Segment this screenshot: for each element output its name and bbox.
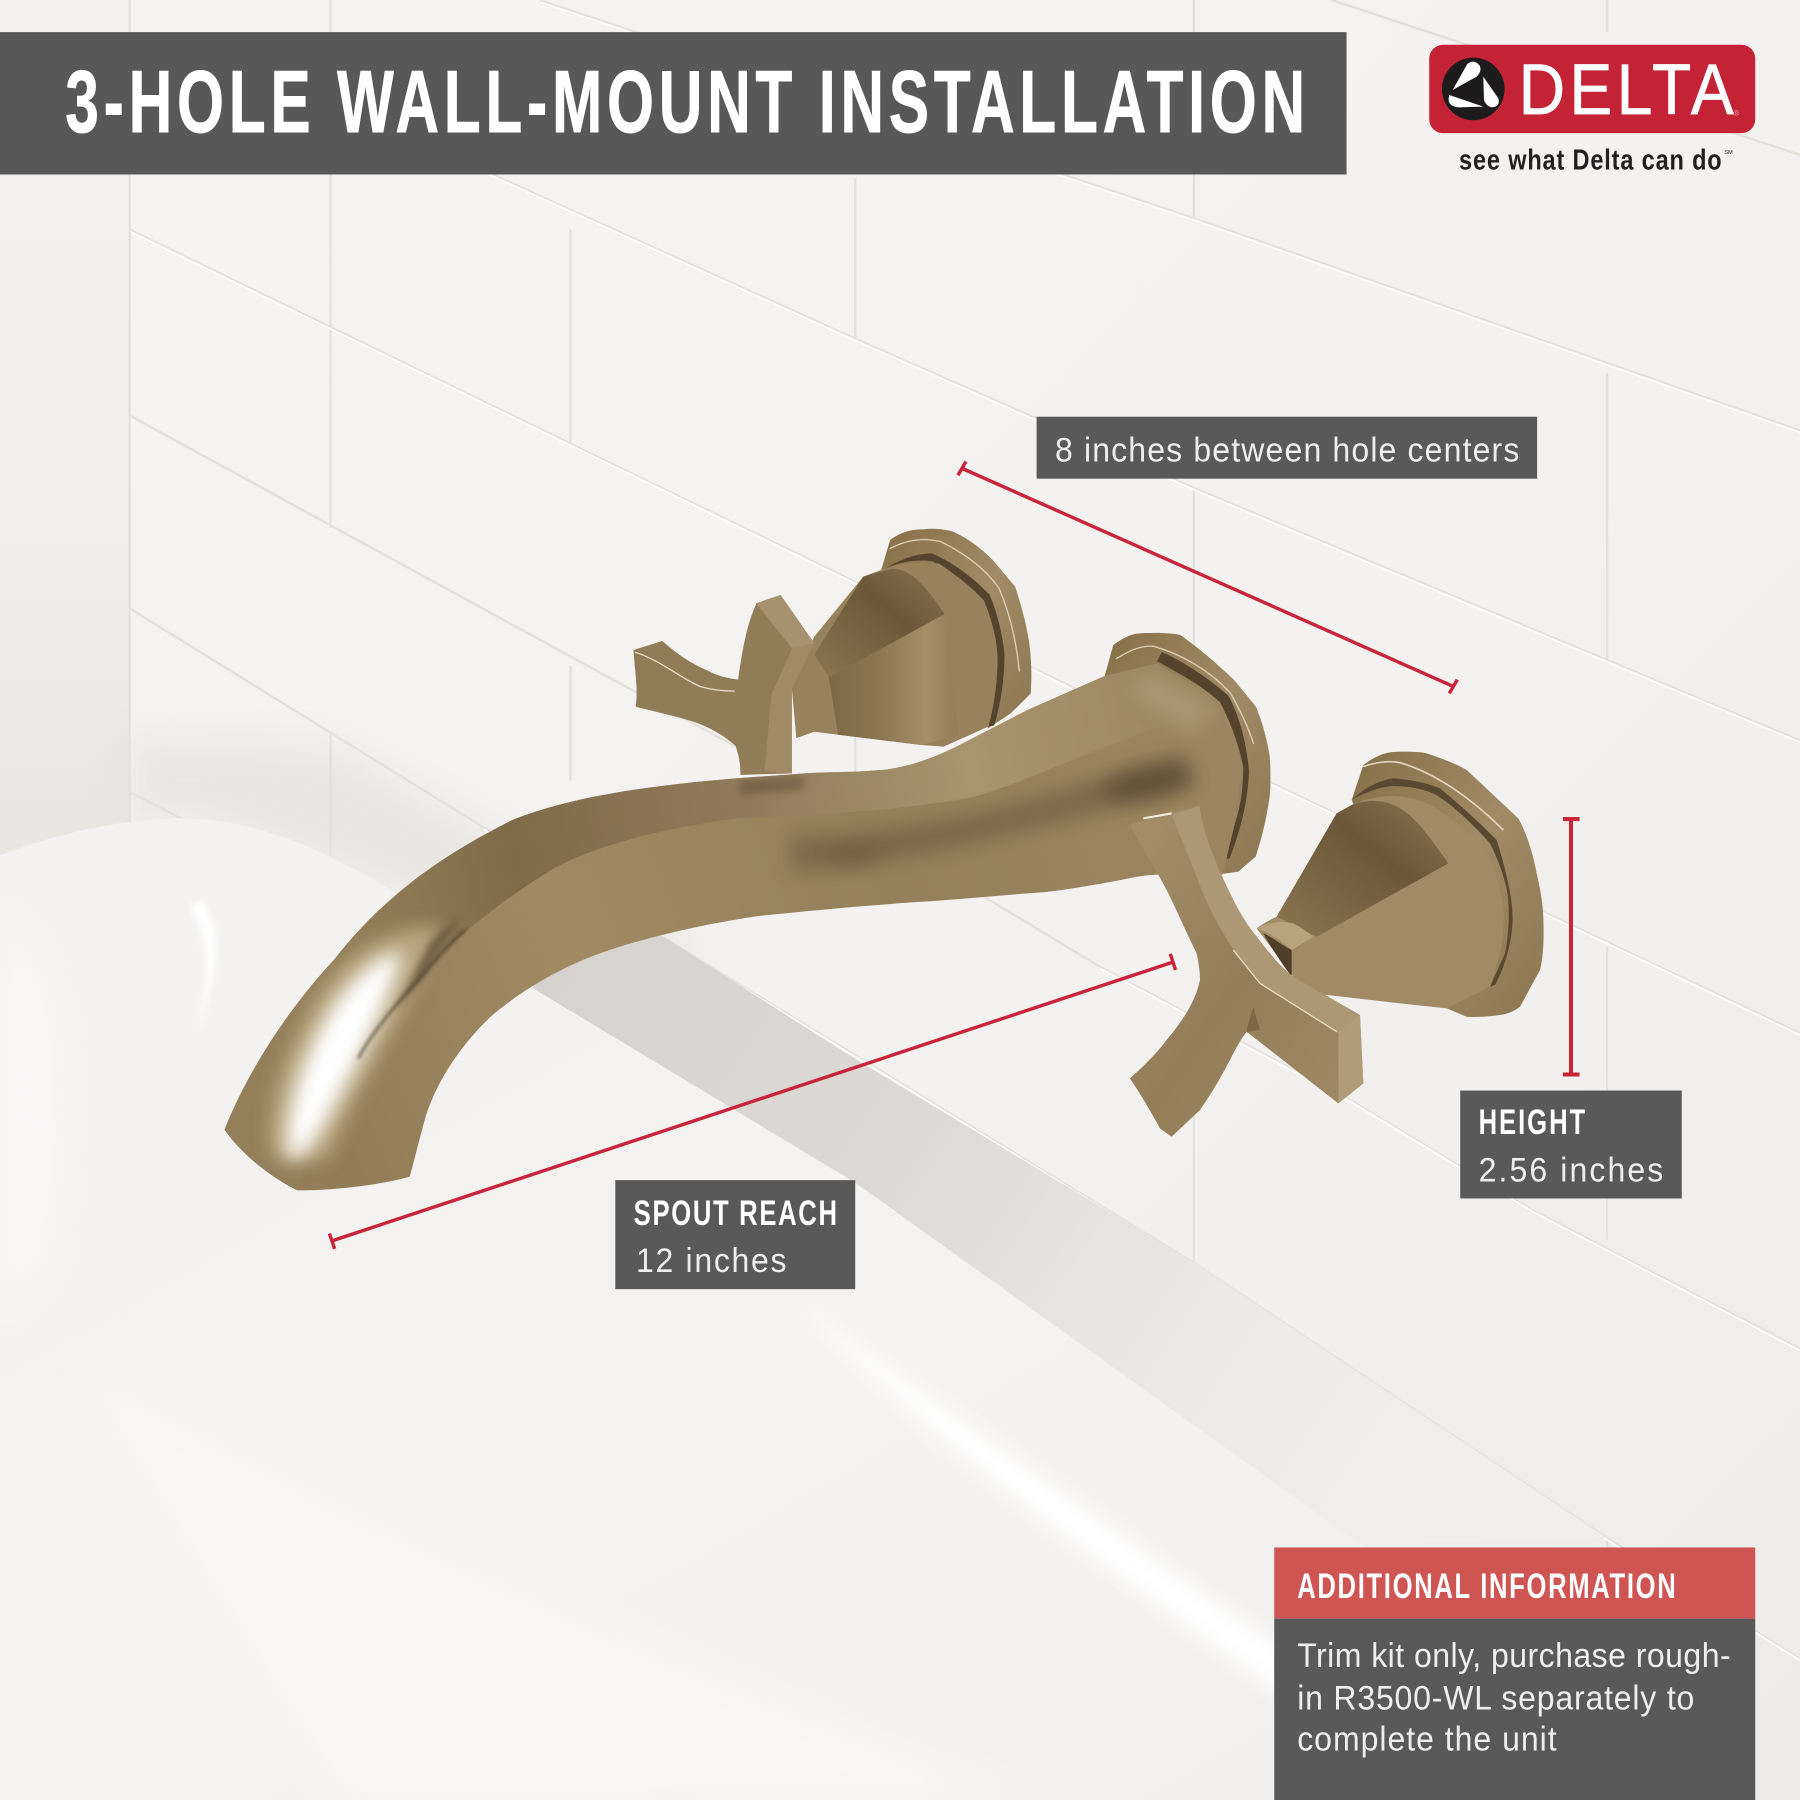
rear handle flange xyxy=(881,529,1031,728)
logo red badge xyxy=(1429,45,1755,133)
spout flange xyxy=(1104,633,1271,875)
front handle flange xyxy=(1352,752,1544,1017)
label: height: 2.56 inches xyxy=(1479,1151,1663,1190)
title banner xyxy=(0,32,1347,174)
faucet: rear handle xyxy=(633,529,1031,775)
logo wordmark: DELTA xyxy=(1519,51,1734,130)
rear handle cross xyxy=(633,595,814,775)
panel text: in R3500-WL separately to xyxy=(1297,1679,1694,1718)
panel text: Trim kit only, purchase rough- xyxy=(1297,1637,1731,1675)
registered mark: ® xyxy=(1733,109,1739,118)
panel header xyxy=(1274,1547,1755,1619)
dimension: spout reach xyxy=(329,954,1176,1249)
label: spout reach xyxy=(615,1180,855,1289)
spout body xyxy=(225,664,1242,1190)
label: spout reach: 12 inches xyxy=(636,1242,787,1280)
spout shading and highlights xyxy=(270,672,1217,1160)
label: 8 inches between hole centers xyxy=(1037,417,1537,479)
panel body xyxy=(1274,1619,1755,1800)
label: spout reach: SPOUT REACH xyxy=(634,1193,837,1233)
panel heading: ADDITIONAL INFORMATION xyxy=(1297,1566,1676,1606)
rear handle cone xyxy=(792,562,995,747)
title text: 3-HOLE WALL-MOUNT INSTALLATION xyxy=(65,54,1305,152)
faucet: front handle xyxy=(1130,752,1544,1137)
panel text xyxy=(1297,1637,1731,1759)
faucet: spout xyxy=(225,633,1271,1190)
front handle cross xyxy=(1130,806,1363,1137)
label: 8 inches between hole centers: 8 inches between hole centers xyxy=(1055,431,1519,470)
label: height: HEIGHT xyxy=(1479,1102,1585,1142)
logo emblem xyxy=(1442,58,1505,120)
front handle cone xyxy=(1257,796,1504,1008)
bathtub xyxy=(0,818,1800,1800)
panel: additional information xyxy=(1274,1547,1755,1800)
logo tagline: see what Delta can do xyxy=(1459,143,1722,176)
dimension: 8 inches between hole centers xyxy=(958,461,1457,693)
label: height xyxy=(1460,1091,1682,1198)
panel text: complete the unit xyxy=(1297,1721,1557,1759)
Delta logo xyxy=(1429,45,1755,176)
service mark: SM xyxy=(1724,150,1733,156)
spout ridge xyxy=(358,930,465,1058)
spout upper facet xyxy=(225,664,1220,1190)
dimension: height xyxy=(1563,818,1580,1074)
shadow band between wall and tub xyxy=(482,907,1607,1544)
